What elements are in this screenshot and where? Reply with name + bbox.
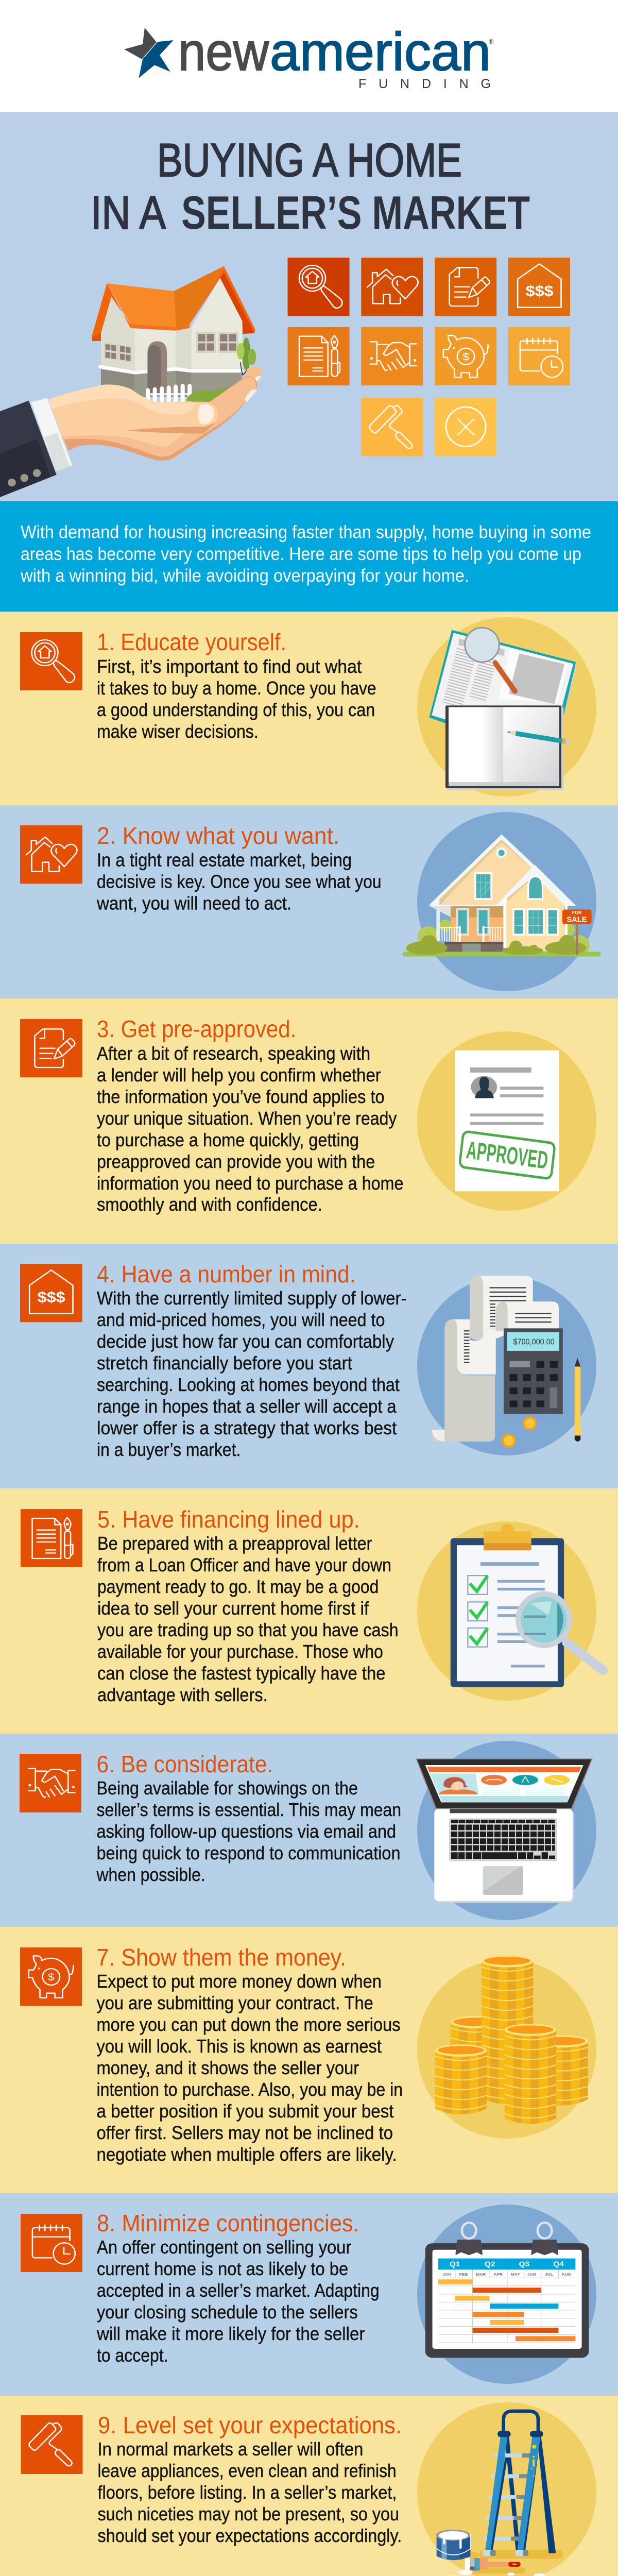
body text xyxy=(98,2438,402,2546)
icon: logo star xyxy=(124,28,174,78)
body text: more you can put down the more serious xyxy=(97,2014,401,2035)
illustration: house for sale: FOR xyxy=(572,910,582,916)
body text: to purchase a home quickly, getting xyxy=(97,1129,359,1150)
icon: calendar and clock xyxy=(21,2214,82,2272)
illustration: gantt chart board: AUG xyxy=(561,2273,571,2277)
panel: intro xyxy=(0,501,618,612)
illustration: hand holding house xyxy=(0,266,262,497)
body text: preapproved can provide you with the xyxy=(97,1151,375,1172)
logo wordmark: ® xyxy=(489,38,494,45)
illustration: gantt chart board: APR xyxy=(493,2273,503,2277)
heading: 7. Show them the money. xyxy=(97,1944,346,1971)
icon: search home xyxy=(20,632,82,690)
illustration: gantt chart board: Q3 xyxy=(519,2261,529,2268)
body text: intention to purchase. Also, you may be in xyxy=(97,2079,403,2100)
heading: 6. Be considerate. xyxy=(97,1751,273,1777)
title: BUYING A HOME xyxy=(157,134,462,187)
body text: lower offer is a strategy that works best xyxy=(97,1417,397,1438)
heading: 8. Minimize contingencies. xyxy=(97,2210,359,2236)
body text xyxy=(97,1971,403,2165)
intro text: with a winning bid, while avoiding overpaying for your home. xyxy=(20,566,469,586)
heading: 1. Educate yourself. xyxy=(97,629,286,655)
body text: your closing schedule to the sellers xyxy=(97,2301,358,2323)
panel: step 7 xyxy=(0,1927,618,2193)
icon: handshake xyxy=(361,327,423,385)
logo wordmark: new xyxy=(178,22,269,82)
illustration: gantt chart board: JUN xyxy=(527,2273,536,2277)
icon: paint roller xyxy=(361,398,423,456)
body text: a lender will help you confirm whether xyxy=(97,1064,381,1086)
body text: offer first. Sellers may not be inclined to xyxy=(97,2122,393,2143)
illustration: receipts and calculator: $700,000.00 xyxy=(513,1337,555,1347)
illustration: approved document xyxy=(417,1031,596,1211)
header: logo xyxy=(0,0,618,112)
heading: 3. Get pre-approved. xyxy=(97,1015,296,1042)
body text: such niceties may not be present, so you xyxy=(98,2503,399,2524)
panel: step 5 xyxy=(0,1488,618,1734)
body text: range in hopes that a seller will accept a xyxy=(97,1396,397,1417)
panel: step 3 xyxy=(0,998,618,1244)
illustration: laptop xyxy=(416,1741,596,1920)
title xyxy=(91,134,530,239)
body text: stretch financially before you start xyxy=(97,1352,352,1374)
heading: 5. Have financing lined up. xyxy=(97,1506,360,1533)
body text: current home is not as likely to be xyxy=(97,2258,348,2279)
intro text xyxy=(20,522,591,586)
body text: you are submitting your contract. The xyxy=(97,1992,373,2013)
icon: calendar and clock xyxy=(508,327,570,385)
icon: piggy bank xyxy=(435,327,496,385)
icon: piggy bank: $ xyxy=(48,1971,55,1983)
icon: house and heart xyxy=(20,825,82,884)
body text: you are trading up so that you have cash xyxy=(97,1619,399,1640)
body text: First, it’s important to find out what xyxy=(97,656,362,677)
panel: step 9 xyxy=(0,2396,618,2576)
icon: house with dollars: $$$ xyxy=(526,282,554,300)
icon: house with dollars: $$$ xyxy=(38,1289,65,1306)
body text: from a Loan Officer and have your down xyxy=(97,1554,391,1575)
icon: handshake xyxy=(20,1754,81,1812)
body text: smoothly and with confidence. xyxy=(97,1194,322,1215)
intro text: With demand for housing increasing faster than supply, home buying in some xyxy=(21,522,591,542)
logo wordmark: FUNDING xyxy=(358,77,491,91)
body text: leave appliances, even clean and refinish xyxy=(98,2460,397,2481)
body text: accepted in a seller’s market. Adapting xyxy=(97,2280,380,2301)
logo wordmark xyxy=(178,22,494,91)
body text: Be prepared with a preapproval letter xyxy=(97,1533,372,1554)
body text: Being available for showings on the xyxy=(97,1777,358,1799)
icon: piggy bank xyxy=(20,1947,82,2006)
panel: step 6 xyxy=(0,1734,618,1927)
body text: should set your expectations accordingly. xyxy=(98,2525,402,2546)
icon: house with dollars xyxy=(508,258,570,316)
illustration: gantt chart board: Q4 xyxy=(553,2261,564,2268)
icon: search home xyxy=(287,258,349,316)
icon: letter and pen xyxy=(21,1509,82,1567)
icon: house and heart xyxy=(361,258,423,316)
title: SELLER’S MARKET xyxy=(181,187,530,239)
panel: step 4 xyxy=(0,1244,618,1488)
logo wordmark: american xyxy=(270,22,491,82)
illustration: coin stacks xyxy=(417,1955,596,2139)
body text xyxy=(97,1043,403,1215)
illustration: books xyxy=(417,617,596,796)
icon: paint roller xyxy=(21,2415,82,2474)
illustration: house for sale: SALE xyxy=(566,916,587,924)
icon: house with dollars xyxy=(20,1264,82,1322)
body text: negotiate when multiple offers are likely. xyxy=(97,2144,397,2165)
heading: 4. Have a number in mind. xyxy=(97,1261,356,1287)
body text: idea to sell your current home first if xyxy=(97,1598,369,1619)
illustration: approved document: APPROVED xyxy=(465,1136,550,1174)
body text: a good understanding of this, you can xyxy=(97,699,375,720)
icon: x circle xyxy=(435,398,496,456)
body text: In a tight real estate market, being xyxy=(97,850,352,870)
panel: step 2 xyxy=(0,805,618,998)
body text: After a bit of research, speaking with xyxy=(97,1043,370,1064)
panel: step 8 xyxy=(0,2193,618,2396)
body text: seller’s terms is essential. This may mean xyxy=(97,1799,401,1820)
icon: piggy bank: $ xyxy=(462,350,469,363)
intro text: areas has become very competitive. Here are some tips to help you come up xyxy=(21,544,581,564)
title: IN A xyxy=(91,187,166,239)
body text: in a buyer’s market. xyxy=(97,1439,241,1460)
body text xyxy=(96,850,382,913)
illustration: gantt chart board xyxy=(417,2205,596,2384)
body text xyxy=(97,656,376,742)
body text: decisive is key. Once you see what you xyxy=(97,871,382,892)
body text: An offer contingent on selling your xyxy=(97,2236,352,2258)
body text xyxy=(96,1777,401,1885)
body text: make wiser decisions. xyxy=(97,721,259,742)
illustration: gantt chart board: JUL xyxy=(545,2273,553,2277)
illustration: receipts and calculator xyxy=(417,1276,596,1455)
illustration: ladder and paint xyxy=(417,2402,596,2576)
body text: will make it more likely for the seller xyxy=(96,2323,365,2344)
illustration: gantt chart board: FEB xyxy=(459,2273,468,2277)
body text: when possible. xyxy=(96,1864,205,1885)
body text: and mid-priced homes, you will need to xyxy=(97,1309,385,1330)
heading: 9. Level set your expectations. xyxy=(98,2412,402,2438)
body text: want, you will need to act. xyxy=(96,893,291,913)
heading: 2. Know what you want. xyxy=(97,822,339,849)
body text: the information you’ve found applies to xyxy=(97,1086,385,1107)
body text: advantage with sellers. xyxy=(97,1684,268,1705)
illustration: gantt chart board: JAN xyxy=(442,2273,451,2277)
body text: being quick to respond to communication xyxy=(97,1842,401,1863)
body text: Expect to put more money down when xyxy=(97,1971,382,1992)
body text: a better position if you submit your best xyxy=(97,2100,394,2122)
body text: can close the fastest typically have the xyxy=(97,1663,385,1684)
illustration: gantt chart board: Q1 xyxy=(450,2261,460,2268)
panel: hero xyxy=(0,112,618,501)
icon grid xyxy=(287,258,570,456)
body text xyxy=(97,1533,399,1705)
body text: With the currently limited supply of lower- xyxy=(97,1287,407,1309)
body text: asking follow-up questions via email and xyxy=(97,1821,396,1842)
body text xyxy=(96,2236,380,2366)
illustration: house for sale xyxy=(403,812,601,991)
body text: floors, before listing. In a seller’s market, xyxy=(98,2482,397,2503)
panel: step 1 xyxy=(0,612,618,805)
body text: to accept. xyxy=(97,2345,168,2366)
body text: available for your purchase. Those who xyxy=(97,1641,383,1662)
body text: you will look. This is known as earnest xyxy=(97,2036,382,2057)
body text: decide just how far you can comfortably xyxy=(97,1331,394,1352)
icon: document and pencil xyxy=(435,258,496,316)
body text: payment ready to go. It may be a good xyxy=(97,1576,379,1597)
body text: information you need to purchase a home xyxy=(97,1173,403,1194)
illustration: clipboard checklist xyxy=(417,1521,603,1701)
illustration: gantt chart board: Q2 xyxy=(485,2261,495,2268)
illustration: gantt chart board: MAR xyxy=(476,2273,486,2277)
body text: searching. Looking at homes beyond that xyxy=(97,1374,400,1395)
body text xyxy=(97,1287,407,1460)
icon: document and pencil xyxy=(20,1019,82,1077)
body text: money, and it shows the seller your xyxy=(97,2057,359,2078)
illustration: gantt chart board: MAY xyxy=(511,2273,521,2277)
body text: In normal markets a seller will often xyxy=(98,2438,363,2460)
body text: your unique situation. When you’re ready xyxy=(97,1108,397,1129)
icon: letter and pen xyxy=(287,327,349,385)
body text: it takes to buy a home. Once you have xyxy=(97,677,376,699)
